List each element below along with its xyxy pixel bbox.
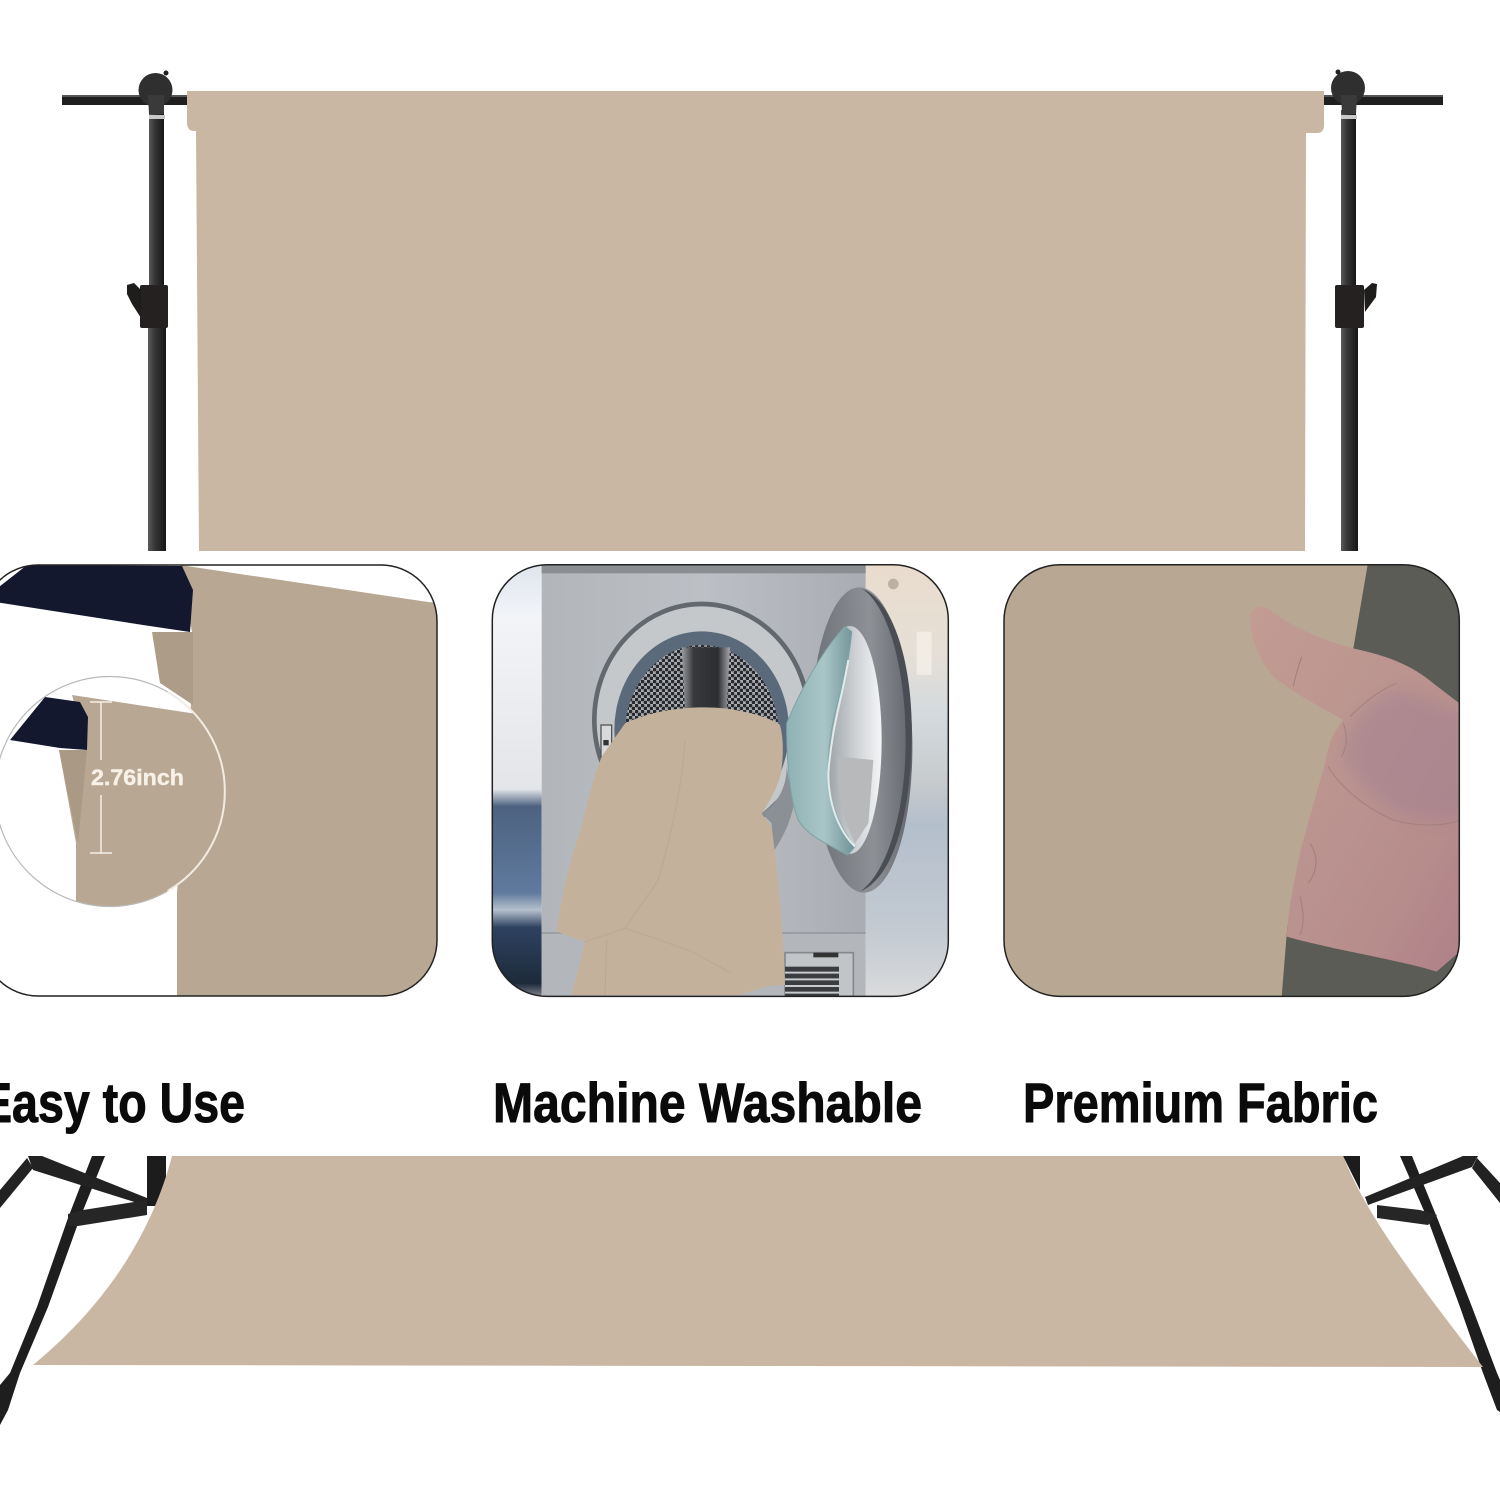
open door	[787, 586, 915, 894]
zoom circle with height detail	[0, 676, 230, 910]
backdrop fabric, upper	[187, 91, 1324, 551]
right light stand, top section	[1318, 70, 1443, 551]
backdrop fabric, lower	[33, 1156, 1483, 1367]
panel outline: machine washable	[492, 565, 948, 996]
fabric going into washer	[557, 707, 785, 995]
washer body	[542, 565, 866, 933]
right tripod legs	[1343, 1156, 1500, 1412]
washer vent	[785, 953, 853, 996]
washer drum opening	[594, 604, 809, 836]
hand	[1250, 607, 1467, 972]
caption: premium fabric: Premium Fabric	[1023, 1071, 1378, 1134]
panel outline: premium fabric	[1004, 565, 1459, 996]
left light stand, top section	[62, 70, 192, 551]
caption: machine washable: Machine Washable	[493, 1071, 922, 1134]
dark backing, lower	[1282, 927, 1463, 997]
dark backing, upper	[1353, 566, 1459, 702]
dark rod	[0, 565, 193, 632]
fabric fold	[152, 632, 193, 705]
panel outline: easy to use	[0, 565, 437, 996]
main fabric	[177, 565, 440, 996]
panel: premium fabric	[1004, 565, 1467, 997]
left tripod legs	[0, 1156, 166, 1425]
panel: machine washable	[492, 565, 948, 996]
panel: easy to use	[0, 565, 440, 996]
door seal arc	[762, 767, 793, 852]
blurred room backgrounds	[492, 565, 542, 996]
measurement label: 2.76inch	[91, 765, 184, 790]
